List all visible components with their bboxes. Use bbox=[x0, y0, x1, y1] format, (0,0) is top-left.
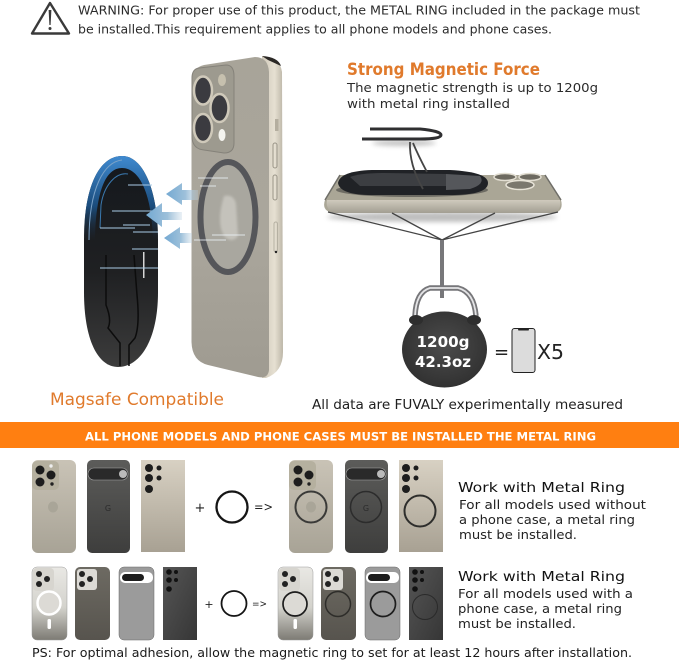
text: work with metal ring, no case: a phone case, a metal ring bbox=[459, 512, 635, 527]
stand bbox=[362, 129, 441, 139]
phone: black Samsung with ring bbox=[409, 567, 443, 640]
text: work with metal ring, with case: must be installed. bbox=[458, 616, 576, 631]
camera lenses bbox=[494, 174, 516, 180]
text: work with metal ring, with case: For all models used with a bbox=[458, 586, 633, 601]
phone: dark Pixel: G bbox=[105, 504, 111, 513]
equals five phones bbox=[494, 328, 564, 372]
lenses bbox=[194, 76, 228, 142]
camera bump bbox=[192, 65, 234, 153]
banner: install metal ring: ALL PHONE MODELS AND PHONE CASES MUST BE INSTALLED THE METAL RING bbox=[85, 430, 596, 444]
panel: large phone back bbox=[192, 56, 283, 378]
straps bbox=[328, 212, 558, 240]
phone: Samsung with ring bbox=[399, 460, 443, 552]
phone: black Samsung bbox=[163, 567, 197, 640]
speed lines bbox=[194, 178, 245, 240]
icon: kettlebell 1200g: 42.3oz bbox=[415, 353, 471, 371]
heading: Strong Magnetic Force: Strong Magnetic Force bbox=[347, 60, 540, 79]
equals five phones: X5 bbox=[537, 340, 564, 364]
banner: install metal ring bbox=[0, 422, 679, 448]
grip on phone bbox=[336, 183, 488, 197]
text: work with metal ring, with case: Work with Metal Ring bbox=[458, 569, 625, 585]
heading: Magsafe Compatible: Magsafe Compatible bbox=[50, 390, 224, 409]
text: work with metal ring, no case: Work with Metal Ring bbox=[458, 480, 625, 496]
icon: magnetic grip disc bbox=[84, 156, 158, 367]
text: work with metal ring, no case bbox=[458, 480, 646, 542]
magnetic ring on phone bbox=[200, 162, 256, 272]
text: magnetic strength: The magnetic strength is up to 1200g bbox=[346, 81, 598, 96]
side buttons bbox=[275, 119, 278, 131]
text: work with metal ring, no case: For all models used without bbox=[459, 497, 646, 512]
phone: dark natural case bbox=[75, 567, 110, 640]
row 1: phones with ring bbox=[289, 460, 443, 553]
row 2: cased phones without ring: => bbox=[252, 599, 267, 610]
text: data note: All data are FUVALY experimentally measured bbox=[312, 398, 623, 413]
phone: dark Pixel bbox=[87, 460, 130, 553]
row 2: cased phones with ring bbox=[278, 567, 443, 640]
text: work with metal ring, with case bbox=[458, 569, 633, 631]
phone body bbox=[324, 175, 562, 213]
equals five phones: = bbox=[494, 342, 509, 363]
row 1: phones without ring bbox=[32, 460, 273, 553]
warning text: WARNING: For proper use of this product, the METAL RING included in the package must bbox=[78, 4, 640, 18]
plus and ring: + bbox=[204, 598, 214, 611]
plus and ring: + bbox=[195, 501, 205, 516]
warning text: be installed.This requirement applies to all phone models and phone cases. bbox=[78, 22, 552, 36]
text: work with metal ring, with case: phone case, a metal ring bbox=[458, 601, 622, 616]
text: work with metal ring, no case: must be installed. bbox=[459, 527, 577, 542]
phone: natural iPhone bbox=[32, 460, 76, 553]
row 2: cased phones without ring bbox=[32, 567, 267, 640]
text: magnetic strength: with metal ring installed bbox=[347, 97, 510, 112]
phone: dark Pixel with ring: G bbox=[363, 504, 369, 513]
phone: grey Pixel case bbox=[119, 567, 154, 640]
phone: grey Pixel case with ring bbox=[365, 567, 400, 640]
icon: kettlebell 1200g bbox=[402, 288, 487, 388]
phone: clear case with ring bbox=[278, 567, 313, 640]
phone: Samsung bbox=[141, 460, 185, 552]
icon: kettlebell 1200g: 1200g bbox=[416, 333, 470, 351]
row 1: phones without ring: => bbox=[254, 500, 273, 514]
phone: natural iPhone with ring bbox=[289, 460, 333, 553]
icon: warning triangle bbox=[32, 3, 69, 34]
arrows: magnetic attraction bbox=[146, 183, 198, 249]
phone: dark Pixel with ring bbox=[345, 460, 388, 553]
text: magnetic strength bbox=[346, 81, 598, 112]
illustration: phone lying flat with grip and weight straps bbox=[324, 129, 562, 298]
warning text bbox=[78, 4, 640, 36]
text: PS note: PS: For optimal adhesion, allow the magnetic ring to set for at least 12 hours after installation. bbox=[32, 645, 632, 660]
phone: clear case bbox=[32, 567, 67, 640]
phone: dark natural case with ring bbox=[321, 567, 356, 640]
